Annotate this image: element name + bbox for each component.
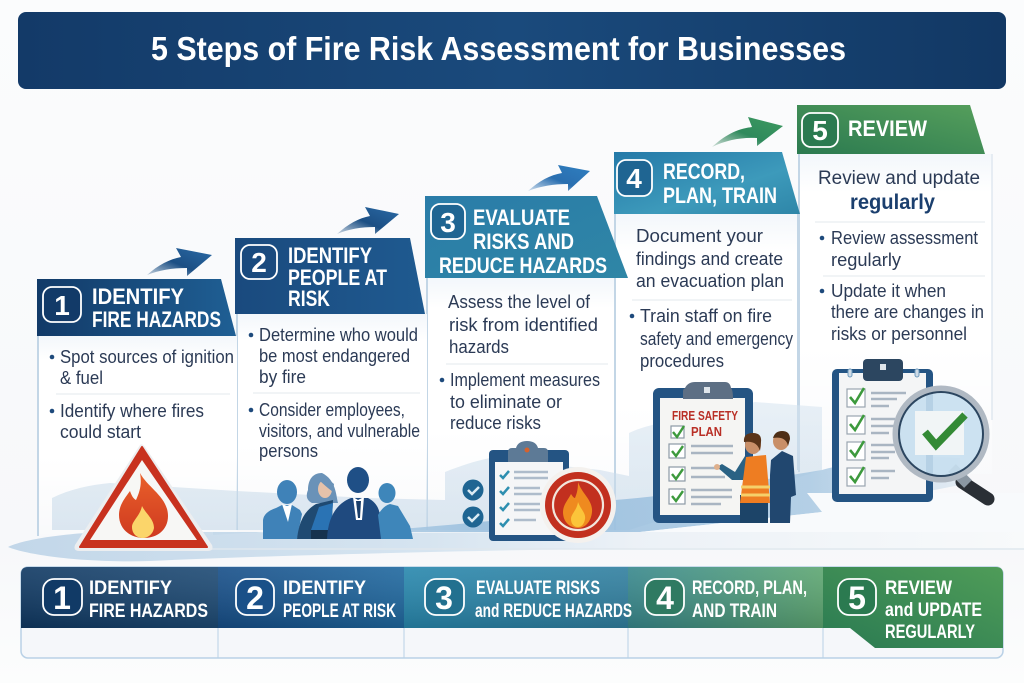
title banner bbox=[18, 12, 1006, 89]
step 2 text: by fire bbox=[259, 367, 306, 387]
arrow: step 4 to 5 bbox=[712, 117, 783, 147]
step 4 header: PLAN, TRAIN bbox=[663, 183, 777, 208]
icon: hazard triangle with flame bbox=[74, 444, 212, 551]
summary step 5: and UPDATE bbox=[885, 600, 982, 621]
step 2 text: visitors, and vulnerable bbox=[259, 421, 420, 441]
summary step 3 bbox=[425, 578, 632, 622]
icon: fire safety plan clipboard with two workers bbox=[653, 382, 796, 523]
step 5 text: there are changes in bbox=[831, 302, 984, 322]
summary step 1: FIRE HAZARDS bbox=[89, 601, 208, 622]
step 3 header: RISKS AND bbox=[473, 229, 574, 254]
step 1 text: & fuel bbox=[60, 368, 103, 388]
step 5 text: Review assessment bbox=[831, 228, 978, 248]
icon: fire safety plan clipboard with two workers: PLAN bbox=[691, 424, 722, 439]
step 4 text: procedures bbox=[640, 351, 724, 371]
summary step 3: EVALUATE RISKS bbox=[476, 578, 600, 599]
icon: fire safety plan clipboard with two workers: FIRE SAFETY bbox=[672, 408, 738, 423]
step 4 text: Document your bbox=[636, 226, 763, 246]
step 3 header: REDUCE HAZARDS bbox=[439, 253, 607, 278]
step 5 header: REVIEW bbox=[848, 116, 927, 141]
step 1 body bbox=[38, 336, 237, 536]
step 4 text: safety and emergency bbox=[640, 329, 793, 349]
step 2 text: Determine who would bbox=[259, 325, 418, 345]
title banner: 5 Steps of Fire Risk Assessment for Businesses bbox=[151, 30, 846, 67]
step 3 header: 3 bbox=[440, 207, 456, 238]
panel: step 5 bbox=[797, 105, 992, 474]
step 2 header bbox=[235, 238, 425, 314]
summary step 5: REVIEW bbox=[885, 578, 952, 599]
summary step 1: IDENTIFY bbox=[89, 578, 172, 599]
step 3 text: reduce risks bbox=[450, 413, 541, 433]
step 5 header: 5 bbox=[812, 115, 828, 146]
step 1 header: IDENTIFY bbox=[92, 284, 184, 309]
step 4 text: Train staff on fire bbox=[640, 306, 772, 326]
step 1 text: Identify where fires bbox=[60, 401, 204, 421]
step 2 text bbox=[249, 325, 420, 461]
step 1 header bbox=[37, 279, 236, 336]
step 3 header bbox=[425, 196, 628, 278]
step 1 header: FIRE HAZARDS bbox=[92, 307, 221, 332]
step 4 header bbox=[614, 152, 800, 214]
step 5 header bbox=[797, 105, 985, 154]
background wave platforms and floor bbox=[8, 402, 1024, 561]
summary step 5 bbox=[838, 578, 982, 643]
step 5 text bbox=[815, 168, 985, 344]
step 5 body bbox=[799, 154, 992, 474]
step 5 text: regularly bbox=[850, 191, 935, 214]
step 4 text: an evacuation plan bbox=[636, 271, 784, 291]
step 1 text bbox=[50, 347, 234, 442]
step 2 header: 2 bbox=[251, 247, 267, 278]
panel: step 4 bbox=[614, 152, 800, 530]
step 3 text: to eliminate or bbox=[450, 392, 562, 412]
step 5 text: Update it when bbox=[831, 281, 946, 301]
summary step 1: 1 bbox=[53, 580, 71, 616]
step 2 body bbox=[237, 314, 427, 530]
summary step 4: RECORD, PLAN, bbox=[692, 578, 807, 599]
summary step 5: 5 bbox=[848, 580, 866, 616]
step 4 header: 4 bbox=[626, 163, 642, 194]
summary step 2: 2 bbox=[246, 580, 264, 616]
step 1 header: 1 bbox=[54, 290, 70, 321]
panel: step 2 bbox=[235, 238, 427, 530]
icon: group of people bbox=[263, 467, 413, 539]
arrow: step 2 to 3 bbox=[337, 207, 399, 234]
step 4 header: RECORD, bbox=[663, 159, 745, 184]
arrow: step 1 to 2 bbox=[147, 248, 212, 276]
step 5 text: regularly bbox=[831, 250, 901, 270]
summary step 4 bbox=[645, 578, 807, 622]
summary step 5: REGULARLY bbox=[885, 622, 975, 643]
step 1 text: could start bbox=[60, 422, 141, 442]
step 3 text: Implement measures bbox=[450, 370, 600, 390]
summary step 1 bbox=[43, 578, 208, 622]
bottom summary bar bbox=[21, 567, 1003, 658]
icon: clipboard with seal bbox=[462, 441, 616, 543]
summary step 3: 3 bbox=[435, 580, 453, 616]
step 4 text bbox=[630, 226, 793, 371]
summary step 2 bbox=[236, 578, 396, 622]
step 2 text: persons bbox=[259, 441, 318, 461]
step 2 header: IDENTIFY bbox=[288, 243, 372, 268]
step 3 header: EVALUATE bbox=[473, 205, 570, 230]
step 2 header: RISK bbox=[288, 286, 330, 311]
step 2 text: be most endangered bbox=[259, 346, 410, 366]
step 2 text: Consider employees, bbox=[259, 400, 405, 420]
step 3 text bbox=[440, 292, 608, 433]
step 1 text: Spot sources of ignition bbox=[60, 347, 234, 367]
summary step 2: PEOPLE AT RISK bbox=[283, 601, 396, 622]
step 4 text: findings and create bbox=[636, 249, 783, 269]
panel: step 3 bbox=[425, 196, 628, 530]
summary step 4: AND TRAIN bbox=[692, 601, 777, 622]
step 4 body bbox=[615, 214, 798, 530]
summary step 3: and REDUCE HAZARDS bbox=[475, 601, 632, 622]
panel: step 1 bbox=[37, 279, 237, 536]
step 3 text: hazards bbox=[449, 337, 509, 357]
arrow: step 3 to 4 bbox=[528, 165, 590, 191]
step 5 text: risks or personnel bbox=[831, 324, 967, 344]
summary step 2: IDENTIFY bbox=[283, 578, 366, 599]
summary step 4: 4 bbox=[656, 580, 674, 616]
step 3 text: risk from identified bbox=[449, 315, 598, 335]
step 3 body bbox=[427, 278, 614, 530]
step 3 text: Assess the level of bbox=[448, 292, 591, 312]
step 5 text: Review and update bbox=[818, 168, 980, 189]
icon: checklist and magnifying glass bbox=[832, 359, 988, 502]
step 2 header: PEOPLE AT bbox=[288, 265, 387, 290]
